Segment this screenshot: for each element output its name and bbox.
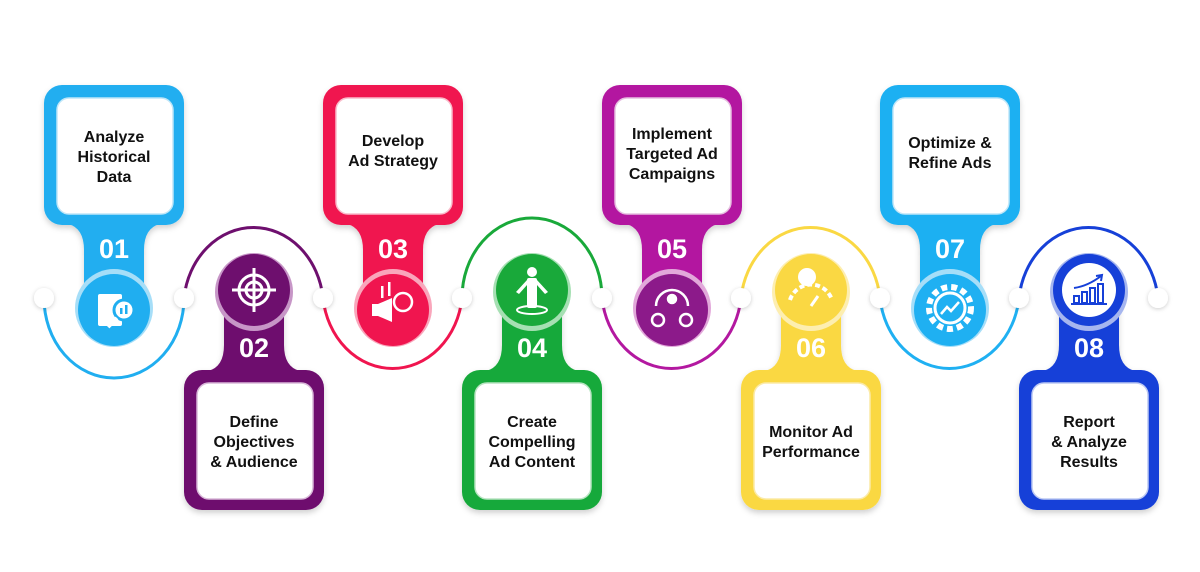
- icon: target: [232, 268, 276, 312]
- step 05 text: Targeted Ad: [626, 146, 718, 163]
- step 07: [880, 85, 1020, 347]
- step 06 text: Performance: [762, 444, 860, 461]
- step 05: [602, 85, 742, 347]
- step 03 text: Ad Strategy: [348, 153, 438, 170]
- icon: megaphone globe: [372, 282, 412, 322]
- step 06 text: Monitor Ad: [769, 424, 853, 441]
- step 03 text: Develop: [362, 133, 424, 150]
- icon: gear growth: [929, 287, 971, 329]
- step 04 text: Ad Content: [489, 454, 576, 471]
- icon: report magnifier: [98, 294, 134, 327]
- step 07 text: Optimize &: [908, 135, 992, 152]
- step 08: [1019, 253, 1159, 510]
- number 04: 04: [517, 333, 547, 363]
- icon: gauge check: [790, 270, 832, 306]
- step 02 text: & Audience: [210, 454, 298, 471]
- step 01 text: Historical: [78, 149, 150, 166]
- step 08 text: & Analyze: [1051, 434, 1127, 451]
- step 06: [741, 253, 881, 510]
- step 04 text: Compelling: [488, 434, 576, 451]
- number 05: 05: [657, 234, 687, 264]
- step 04: [462, 253, 602, 510]
- number 03: 03: [378, 234, 408, 264]
- step 02 text: Define: [230, 414, 279, 431]
- step 08 text: Results: [1060, 454, 1118, 471]
- step 01: [44, 85, 184, 347]
- step 04 text: Create: [507, 414, 557, 431]
- step 07 text: Refine Ads: [909, 155, 992, 172]
- number 06: 06: [796, 333, 826, 363]
- step 05 text: Campaigns: [629, 166, 715, 183]
- connector dots: [34, 288, 1168, 308]
- step 03: [323, 85, 463, 347]
- step 08 text: Report: [1063, 414, 1115, 431]
- number 08: 08: [1074, 333, 1104, 363]
- connector arcs: [44, 218, 1158, 378]
- number 02: 02: [239, 333, 269, 363]
- number 01: 01: [99, 234, 129, 264]
- icon: person on spot: [516, 267, 548, 314]
- icon: person cycle: [652, 290, 692, 326]
- icon: bar chart growth: [1071, 275, 1107, 304]
- number 07: 07: [935, 234, 965, 264]
- step 01 text: Data: [97, 169, 131, 186]
- step 02: [184, 253, 324, 510]
- step 02 text: Objectives: [214, 434, 295, 451]
- step 01 text: Analyze: [84, 129, 144, 146]
- step 05 text: Implement: [632, 126, 713, 143]
